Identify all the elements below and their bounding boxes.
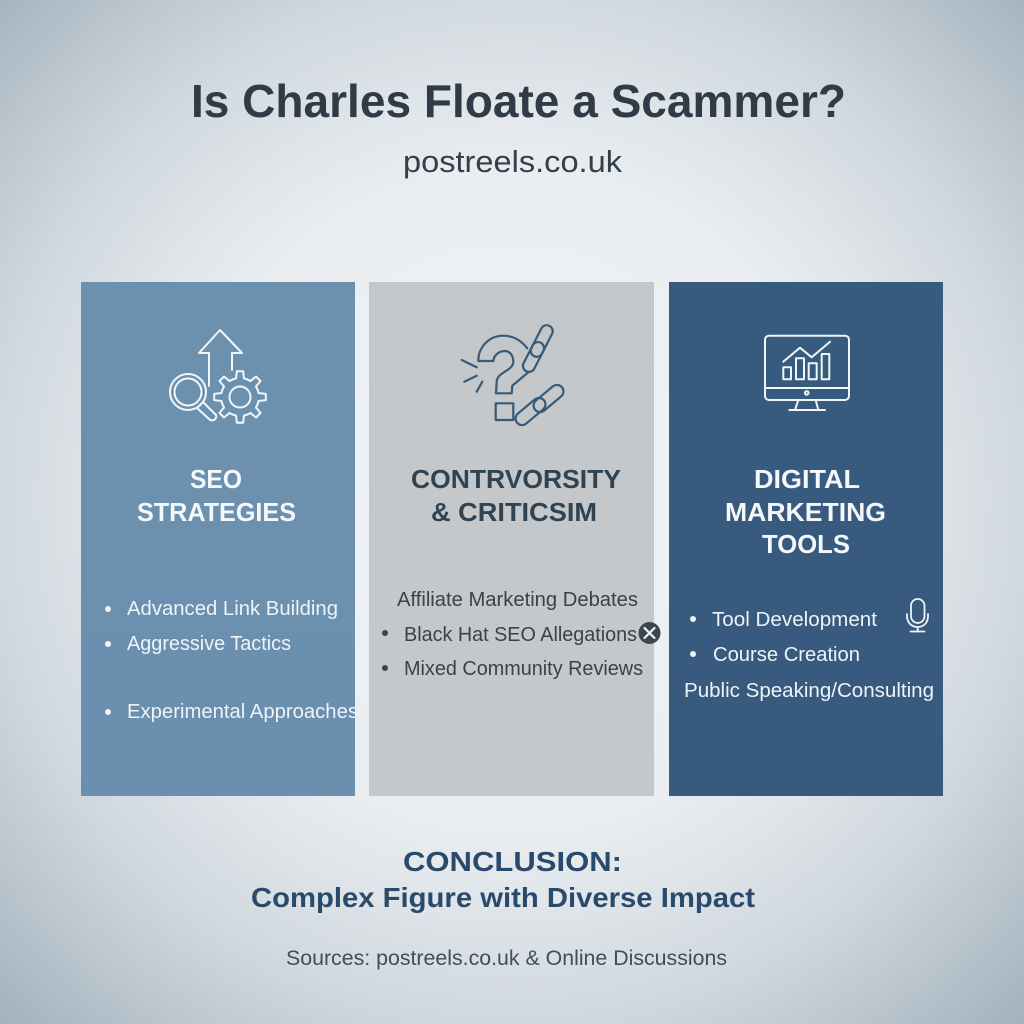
list: criticisms xyxy=(382,589,643,680)
sources: Sources: postreels.co.uk & Online Discussions xyxy=(286,946,727,970)
subtitle: postreels.co.uk xyxy=(403,144,623,179)
conclusion xyxy=(251,846,755,913)
panel: controversy and criticism xyxy=(369,282,660,796)
list: tools: Tool Development xyxy=(712,609,877,631)
heading: SEO strategies: SEO xyxy=(190,466,242,494)
icon: microphone xyxy=(907,599,928,632)
list: SEO tactics xyxy=(105,598,358,723)
list: criticisms: Affiliate Marketing Debates xyxy=(397,589,638,611)
list: criticisms: Mixed Community Reviews xyxy=(404,658,643,680)
icon: arrow, magnifier and gear xyxy=(170,330,266,423)
title: Is Charles Floate a Scammer? xyxy=(191,75,846,127)
heading: digital marketing tools: MARKETING xyxy=(725,499,886,527)
panel: digital marketing tools xyxy=(669,282,943,796)
conclusion: CONCLUSION: xyxy=(403,846,622,877)
icon: x mark xyxy=(638,622,660,644)
heading: controversy and criticism: CONTRVORSITY xyxy=(411,466,621,494)
icon: question mark and broken chain xyxy=(462,323,566,428)
heading: digital marketing tools xyxy=(725,466,886,559)
list: tools: Public Speaking/Consulting xyxy=(684,680,934,702)
list: tools xyxy=(684,609,934,702)
panel: SEO strategies xyxy=(81,282,358,796)
list: SEO tactics: Aggressive Tactics xyxy=(127,633,291,655)
heading: controversy and criticism xyxy=(411,466,621,527)
list: SEO tactics: Advanced Link Building xyxy=(127,598,338,620)
heading: SEO strategies: STRATEGIES xyxy=(137,499,296,527)
heading: digital marketing tools: DIGITAL xyxy=(754,466,860,494)
list: SEO tactics: Experimental Approaches xyxy=(127,701,358,723)
heading: SEO strategies xyxy=(137,466,296,527)
list: criticisms: Black Hat SEO Allegations xyxy=(404,624,637,646)
heading: digital marketing tools: TOOLS xyxy=(762,531,850,559)
icon: monitor with chart xyxy=(765,336,849,410)
conclusion: Complex Figure with Diverse Impact xyxy=(251,882,755,913)
list: tools: Course Creation xyxy=(713,644,860,666)
heading: controversy and criticism: & CRITICSIM xyxy=(431,499,597,527)
